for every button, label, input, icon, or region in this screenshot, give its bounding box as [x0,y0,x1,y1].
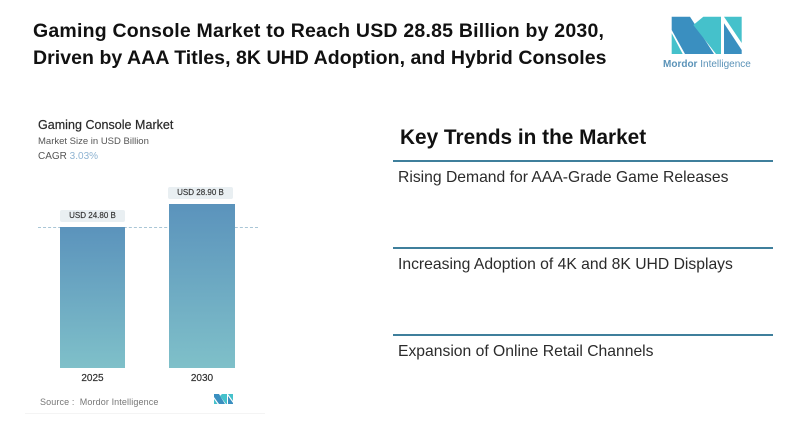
icon: small logo [214,394,233,404]
source: Source : Mordor Intelligence [40,397,159,407]
title: Gaming Console Market to Reach USD 28.85 Billion by 2030, [33,20,604,42]
trend 2: Increasing Adoption of 4K and 8K UHD Displays [398,256,733,272]
label USD 24.80 B [60,210,125,222]
trend 3: Expansion of Online Retail Channels [398,342,654,360]
bar 2025 [60,227,125,368]
label USD 28.90 B [168,187,233,199]
trends heading: Key Trends in the Market [400,126,646,149]
title: Driven by AAA Titles, 8K UHD Adoption, and Hybrid Consoles [33,46,607,68]
CAGR: CAGR 3.03% [38,151,98,162]
chart subtitle: Market Size in USD Billion [38,136,149,147]
reference dashed line [38,227,258,228]
year 2025: 2025 [81,373,104,384]
icon: Mordor Intelligence logo: Mordor Intelligence [663,59,751,70]
trend 1: Rising Demand for AAA-Grade Game Releases [398,168,728,186]
title [33,20,607,68]
year 2030: 2030 [191,373,213,384]
chart heading: Gaming Console Market [38,118,173,132]
label USD 24.80 B: USD 24.80 B [69,211,116,220]
label USD 28.90 B: USD 28.90 B [177,188,224,197]
panel: market size chart [25,105,265,414]
icon: Mordor Intelligence logo [663,16,751,70]
bar 2030 [169,204,235,368]
